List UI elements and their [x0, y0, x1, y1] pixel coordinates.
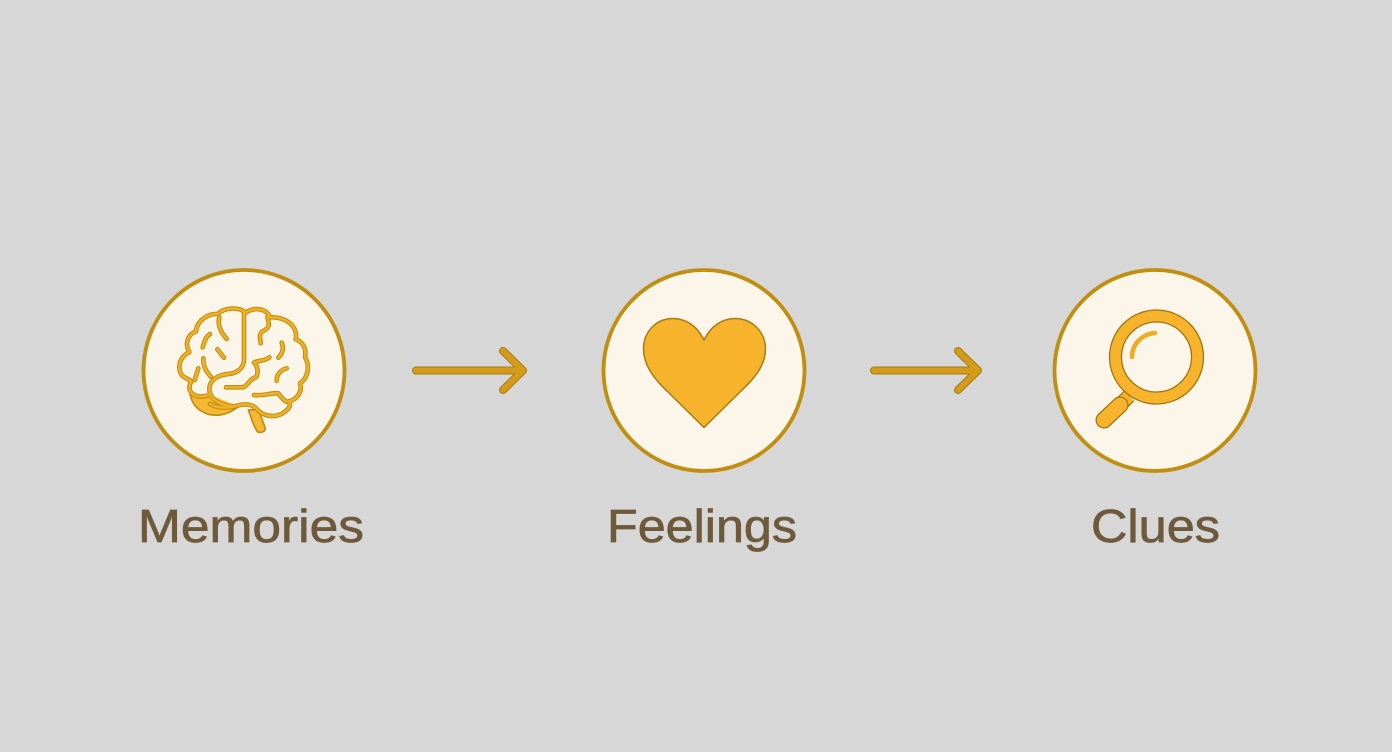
magnifier glint — [1132, 333, 1155, 357]
arrow: feelings to clues — [874, 351, 978, 390]
brain stem — [248, 409, 265, 432]
step: memories — [138, 270, 364, 552]
arrow: memories to feelings — [416, 351, 523, 390]
icon circle: feelings — [604, 270, 804, 471]
magnifier ring outlines — [1110, 310, 1204, 404]
icon circle: clues — [1054, 270, 1256, 471]
label: Memories: Memories — [138, 500, 364, 552]
icon: magnifying glass — [1104, 310, 1204, 420]
step: feelings — [604, 270, 804, 552]
magnifier handle — [1104, 396, 1129, 420]
brain cerebellum edge — [190, 394, 238, 415]
brain lines outer — [179, 309, 308, 416]
icon: brain — [179, 309, 308, 432]
brain lines inner — [179, 309, 308, 416]
icon circle: memories — [144, 270, 344, 471]
label: Clues: Clues — [1091, 500, 1220, 552]
label: Feelings: Feelings — [607, 500, 797, 552]
brain cerebellum fill — [190, 394, 238, 415]
magnifier ring — [1116, 316, 1198, 398]
step: clues — [1054, 270, 1256, 552]
icon: heart — [644, 318, 766, 428]
